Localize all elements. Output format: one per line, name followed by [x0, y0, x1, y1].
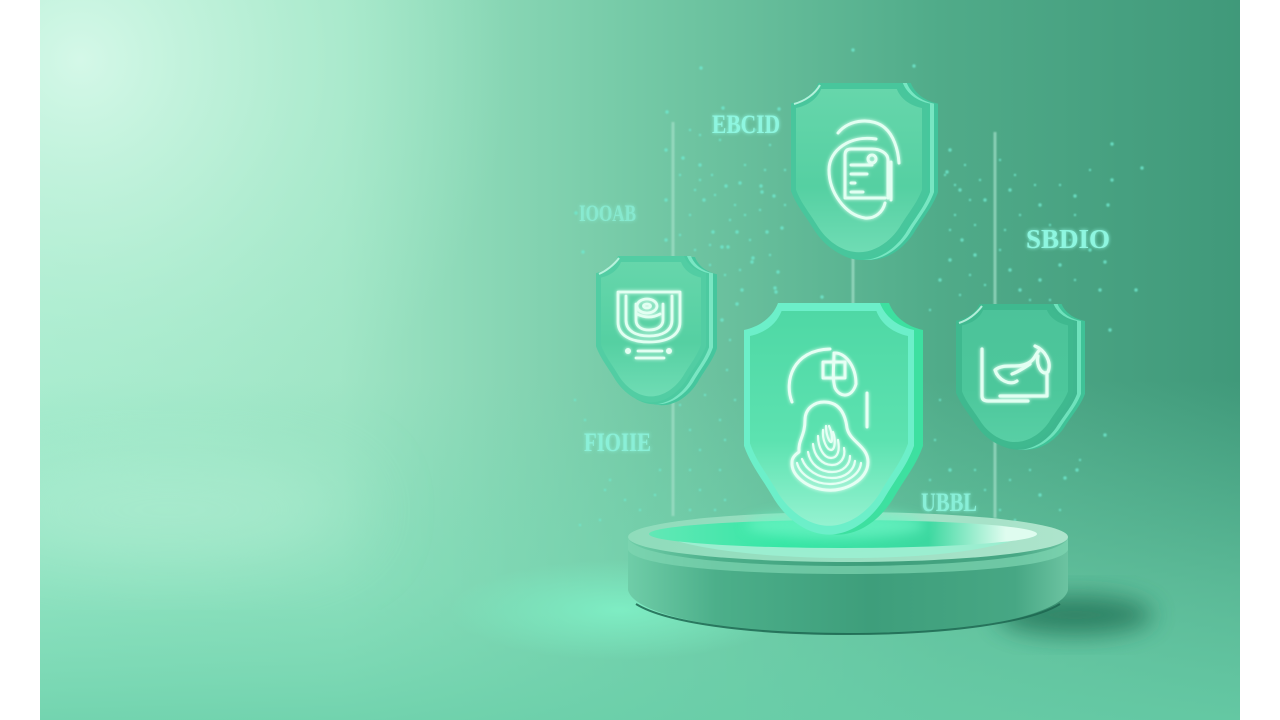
shield body [956, 304, 1085, 450]
shield: fingerprint icon [744, 303, 925, 539]
podium [628, 512, 1068, 634]
label: SBDIO: SBDIO [1026, 224, 1110, 254]
podium rim [628, 512, 1068, 562]
hologram vertical lines [673, 122, 995, 518]
label: UBBL: UBBL [921, 488, 977, 517]
shield: chart icon [956, 304, 1085, 450]
podium bottom edge [636, 604, 1060, 634]
shield: camera icon [596, 256, 717, 405]
shield body [791, 83, 938, 260]
shield body [596, 256, 717, 405]
podium rim edge [628, 538, 1068, 574]
label: IOOAB: IOOAB [579, 201, 636, 226]
shield body [744, 303, 923, 535]
icon: chart with link [982, 346, 1049, 401]
podium front band [655, 530, 1034, 558]
shield: document icon [791, 83, 938, 260]
icon: fingerprint and keyhole [789, 349, 868, 490]
icon: document in oval [829, 121, 899, 218]
hologram data dots [575, 50, 1142, 525]
podium side wall [628, 536, 1068, 634]
shield glow [745, 511, 925, 539]
label: EBCID: EBCID [712, 110, 780, 139]
podium inner glow [649, 520, 1037, 548]
floor shadow of podium [997, 595, 1153, 635]
icon: camera frame [618, 292, 680, 358]
label: FIOIIE: FIOIIE [584, 428, 651, 457]
